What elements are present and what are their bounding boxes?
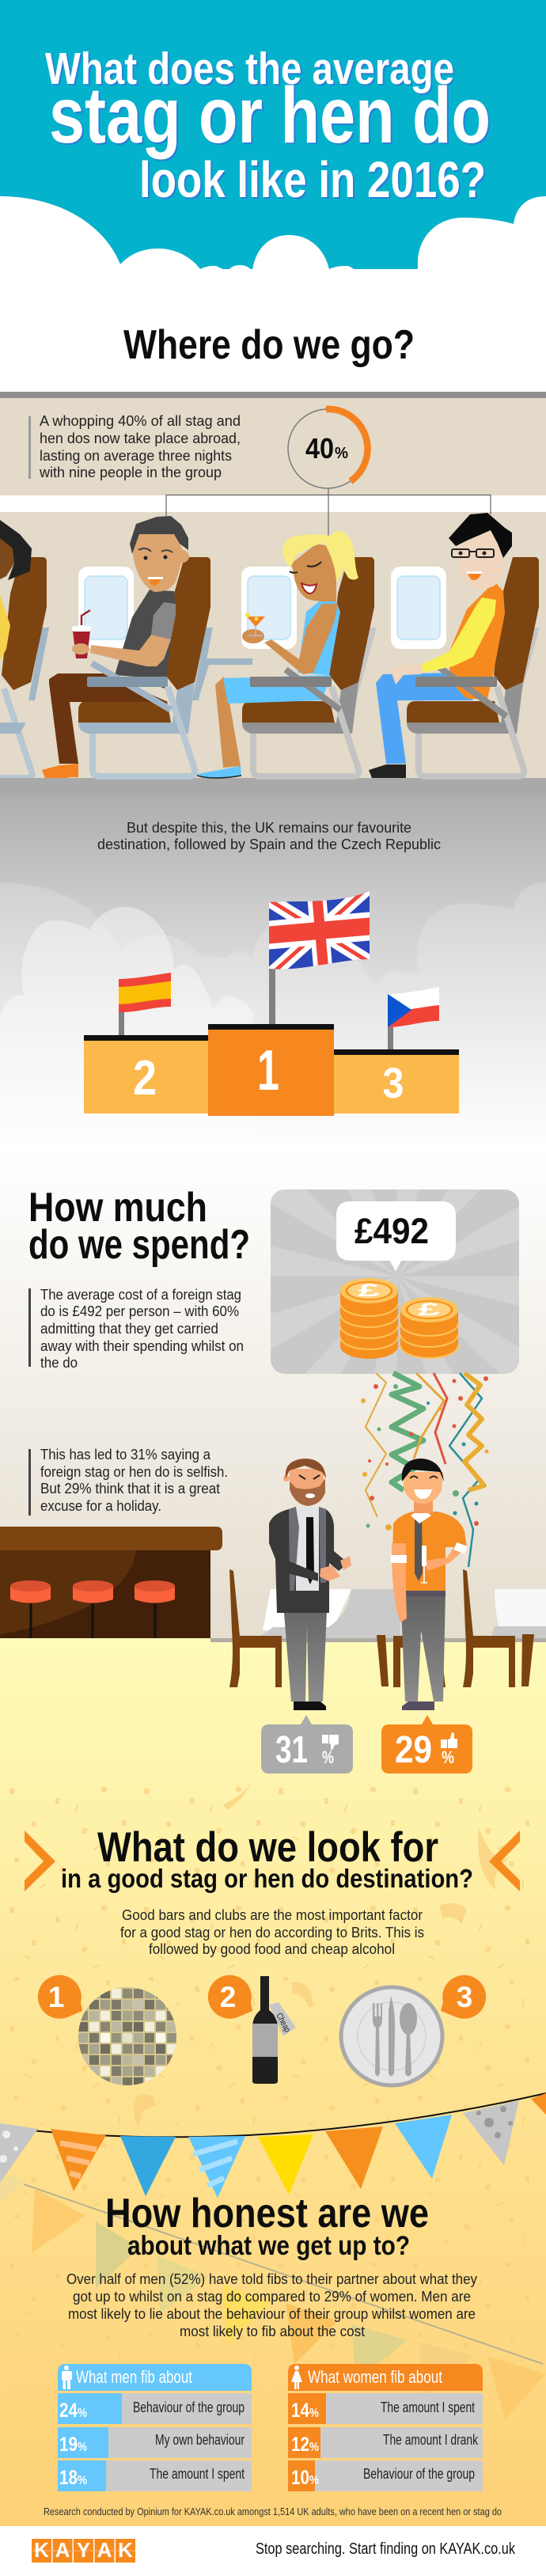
- callout: 31 percent: %: [322, 1747, 334, 1767]
- person: left passenger: [0, 520, 32, 661]
- text: 40 percent abroad: [28, 413, 241, 480]
- text: bars and clubs: for a good stag or hen do according to Brits. This is: [120, 1925, 424, 1941]
- panel: floor background: [0, 1638, 546, 2526]
- text: selfish or excuse: But 29% think that it is a great: [40, 1481, 220, 1497]
- icon: thumbs up: [441, 1732, 457, 1748]
- chart: what women fib about: %: [309, 2407, 319, 2420]
- chart: what women fib about: Behaviour of the group: [363, 2466, 475, 2482]
- text: bars and clubs: followed by good food and cheap alcohol: [149, 1941, 395, 1957]
- icon: coin stacks: [340, 1278, 458, 1359]
- heading: how honest are we: about what we get up to?: [127, 2231, 410, 2261]
- text: bars and clubs: [120, 1907, 424, 1957]
- tables and chairs: [229, 1569, 546, 1687]
- panel: spend background: [0, 1148, 546, 1638]
- speech bubble: £492: [336, 1201, 456, 1271]
- chevrons: [25, 1831, 520, 1891]
- panel: cabin: [0, 398, 546, 778]
- icon: disco ball: [78, 1987, 176, 2085]
- heading: what do we look for: [61, 1824, 473, 1893]
- badge: 2: 2: [220, 1981, 236, 2013]
- icon: man: [62, 2365, 72, 2389]
- chart: what men fib about: The amount I spent: [150, 2466, 245, 2482]
- bunting: [0, 2093, 546, 2198]
- stool 3: [135, 1580, 175, 1688]
- chart: what women fib about: What women fib about: [308, 2367, 442, 2387]
- callout: 29 percent: [381, 1715, 472, 1774]
- donut chart: 40 percent: 40: [305, 432, 334, 465]
- chart: what women fib about: 10: [291, 2467, 309, 2489]
- chart: what men fib about: 18: [59, 2467, 78, 2489]
- badge: 1: 1: [48, 1981, 64, 2013]
- chart: what women fib about: %: [309, 2441, 319, 2454]
- text: average cost: the do: [40, 1355, 78, 1371]
- icon: woman: [291, 2365, 302, 2389]
- podium: 1: [257, 1039, 279, 1102]
- title: What does the average: [47, 45, 456, 96]
- podium: 3: [383, 1060, 404, 1107]
- panel: £492 coins: [271, 1189, 519, 1374]
- text: favourite destination: [97, 820, 441, 852]
- floor strip: [0, 778, 546, 794]
- stool 2: [73, 1580, 113, 1688]
- speech bubble: £492: £492: [355, 1211, 429, 1251]
- text: average cost: admitting that they get carried: [40, 1321, 218, 1337]
- text: favourite destination: But despite this, the UK remains our favourite: [127, 820, 411, 836]
- chart: what men fib about: Behaviour of the group: [133, 2400, 245, 2415]
- flag: UK: [269, 891, 370, 1024]
- donut chart: 40 percent: [288, 409, 367, 488]
- chart: what men fib about: 24: [59, 2400, 78, 2422]
- heading: what do we look for: What do we look for: [97, 1824, 438, 1871]
- bar counter and stools: [0, 1527, 222, 1688]
- chart: what women fib about: The amount I spent: [381, 2400, 475, 2415]
- text: average cost: do is £492 per person – with 60%: [40, 1303, 239, 1319]
- icon: coin stacks: £: [358, 1280, 381, 1300]
- text: fibs: got up to whilst on a stag do compared to 29% of women. Men are: [73, 2289, 471, 2305]
- badge: 3: [441, 1975, 486, 2019]
- badge: 2: [208, 1975, 252, 2019]
- heading: how honest are we: [105, 2191, 429, 2261]
- streamers and confetti: [361, 1373, 489, 1567]
- connector lines: [166, 488, 491, 536]
- person: woman with cocktail: [197, 531, 358, 778]
- badge: 3: 3: [457, 1981, 472, 2013]
- title: What does the average: [45, 44, 454, 94]
- text: selfish or excuse: excuse for a holiday.: [40, 1498, 161, 1514]
- podium: [84, 1024, 459, 1116]
- icon: wine bottle: Cheap: [274, 2012, 292, 2035]
- chart: what men fib about: %: [78, 2441, 87, 2454]
- person: man with drink: [42, 516, 189, 778]
- flag: Czech Republic: [388, 987, 439, 1049]
- panel: sky header background: [0, 0, 546, 269]
- panel: footer: [0, 2526, 546, 2576]
- chart: what women fib about: [288, 2364, 483, 2491]
- chart: what women fib about: The amount I drank: [383, 2432, 479, 2448]
- text: fibs: most likely to fib about the cost: [180, 2324, 365, 2339]
- text: average cost: away with their spending whilst on: [40, 1338, 244, 1354]
- text: 40 percent abroad: lasting on average three nights: [40, 448, 232, 464]
- chart: what women fib about: %: [309, 2474, 319, 2487]
- chart: what men fib about: My own behaviour: [155, 2432, 245, 2448]
- text: fibs: most likely to lie about the behaviour of their group whilst women are: [68, 2306, 476, 2322]
- callout: 29 percent: 29: [395, 1729, 432, 1771]
- text: favourite destination: destination, followed by Spain and the Czech Republic: [97, 837, 441, 852]
- text: 40 percent abroad: hen dos now take place abroad,: [40, 431, 241, 446]
- chart: what women fib about: 12: [291, 2434, 309, 2456]
- seat: man: [78, 557, 252, 776]
- icon: plate and cutlery: [341, 1987, 442, 2085]
- chart: what women fib about: 14: [291, 2400, 309, 2422]
- logo: KAYAK: K: [118, 2538, 133, 2562]
- text: fibs: [66, 2271, 477, 2339]
- text: average cost: [28, 1287, 244, 1371]
- heading: how honest are we: How honest are we: [105, 2191, 429, 2236]
- chart: what men fib about: %: [78, 2407, 87, 2420]
- heading: how much do we spend: do we spend?: [28, 1222, 250, 1268]
- donut chart: 40 percent: %: [335, 445, 348, 462]
- logo: KAYAK: A: [97, 2538, 112, 2562]
- chart: what men fib about: 19: [59, 2434, 78, 2456]
- text: selfish or excuse: [28, 1447, 228, 1516]
- person: angry man: [269, 1459, 351, 1710]
- callout: 31 percent: [261, 1715, 353, 1774]
- stool 1: [10, 1580, 51, 1688]
- confetti pattern: [0, 1781, 546, 2366]
- logo: KAYAK: Y: [77, 2538, 90, 2562]
- seat: far left: [0, 557, 49, 778]
- text: fibs: Over half of men (52%) have told fibs to their partner about what they: [66, 2271, 477, 2287]
- chart: what men fib about: [58, 2364, 252, 2491]
- logo: KAYAK: [32, 2538, 135, 2563]
- chart: what men fib about: %: [78, 2474, 87, 2487]
- logo: KAYAK: K: [34, 2538, 49, 2562]
- icon: wine bottle: [252, 1976, 296, 2084]
- icon: coin stacks: £: [418, 1299, 442, 1319]
- windows: [78, 567, 446, 649]
- text: bars and clubs: Good bars and clubs are the most important factor: [122, 1907, 423, 1923]
- flag: Spain: [119, 973, 171, 1035]
- text: selfish or excuse: This has led to 31% saying a: [40, 1447, 211, 1463]
- panel: destinations background: [0, 794, 546, 1148]
- heading: where do we go: Where do we go?: [123, 322, 415, 368]
- badge: 1: [38, 1975, 82, 2019]
- person: man with glasses: [369, 513, 512, 778]
- text: 40 percent abroad: A whopping 40% of all stag and: [40, 413, 241, 429]
- heading: how much do we spend: How much: [28, 1185, 207, 1231]
- white clouds: [0, 196, 546, 398]
- seat: woman: [242, 557, 377, 776]
- logo: KAYAK: A: [55, 2538, 70, 2562]
- faded bunting: [0, 2172, 546, 2419]
- person: happy man: [391, 1459, 467, 1710]
- text: selfish or excuse: foreign stag or hen do is selfish.: [40, 1464, 228, 1480]
- heading: what do we look for: in a good stag or hen do destination?: [61, 1864, 473, 1893]
- chart: what men fib about: What men fib about: [76, 2367, 192, 2387]
- text: 40 percent abroad: with nine people in the group: [39, 465, 222, 480]
- title: [45, 44, 492, 210]
- large confetti shapes: [134, 1782, 510, 2129]
- icon: thumbs down: [322, 1735, 339, 1750]
- seat: third passenger: [407, 557, 540, 776]
- callout: 31 percent: 31: [275, 1729, 308, 1771]
- text: average cost: The average cost of a foreign stag: [40, 1287, 241, 1303]
- callout: 29 percent: %: [442, 1747, 454, 1767]
- podium: 2: [133, 1051, 157, 1106]
- heading: how much do we spend: [28, 1185, 250, 1268]
- faded clouds: [0, 882, 546, 1148]
